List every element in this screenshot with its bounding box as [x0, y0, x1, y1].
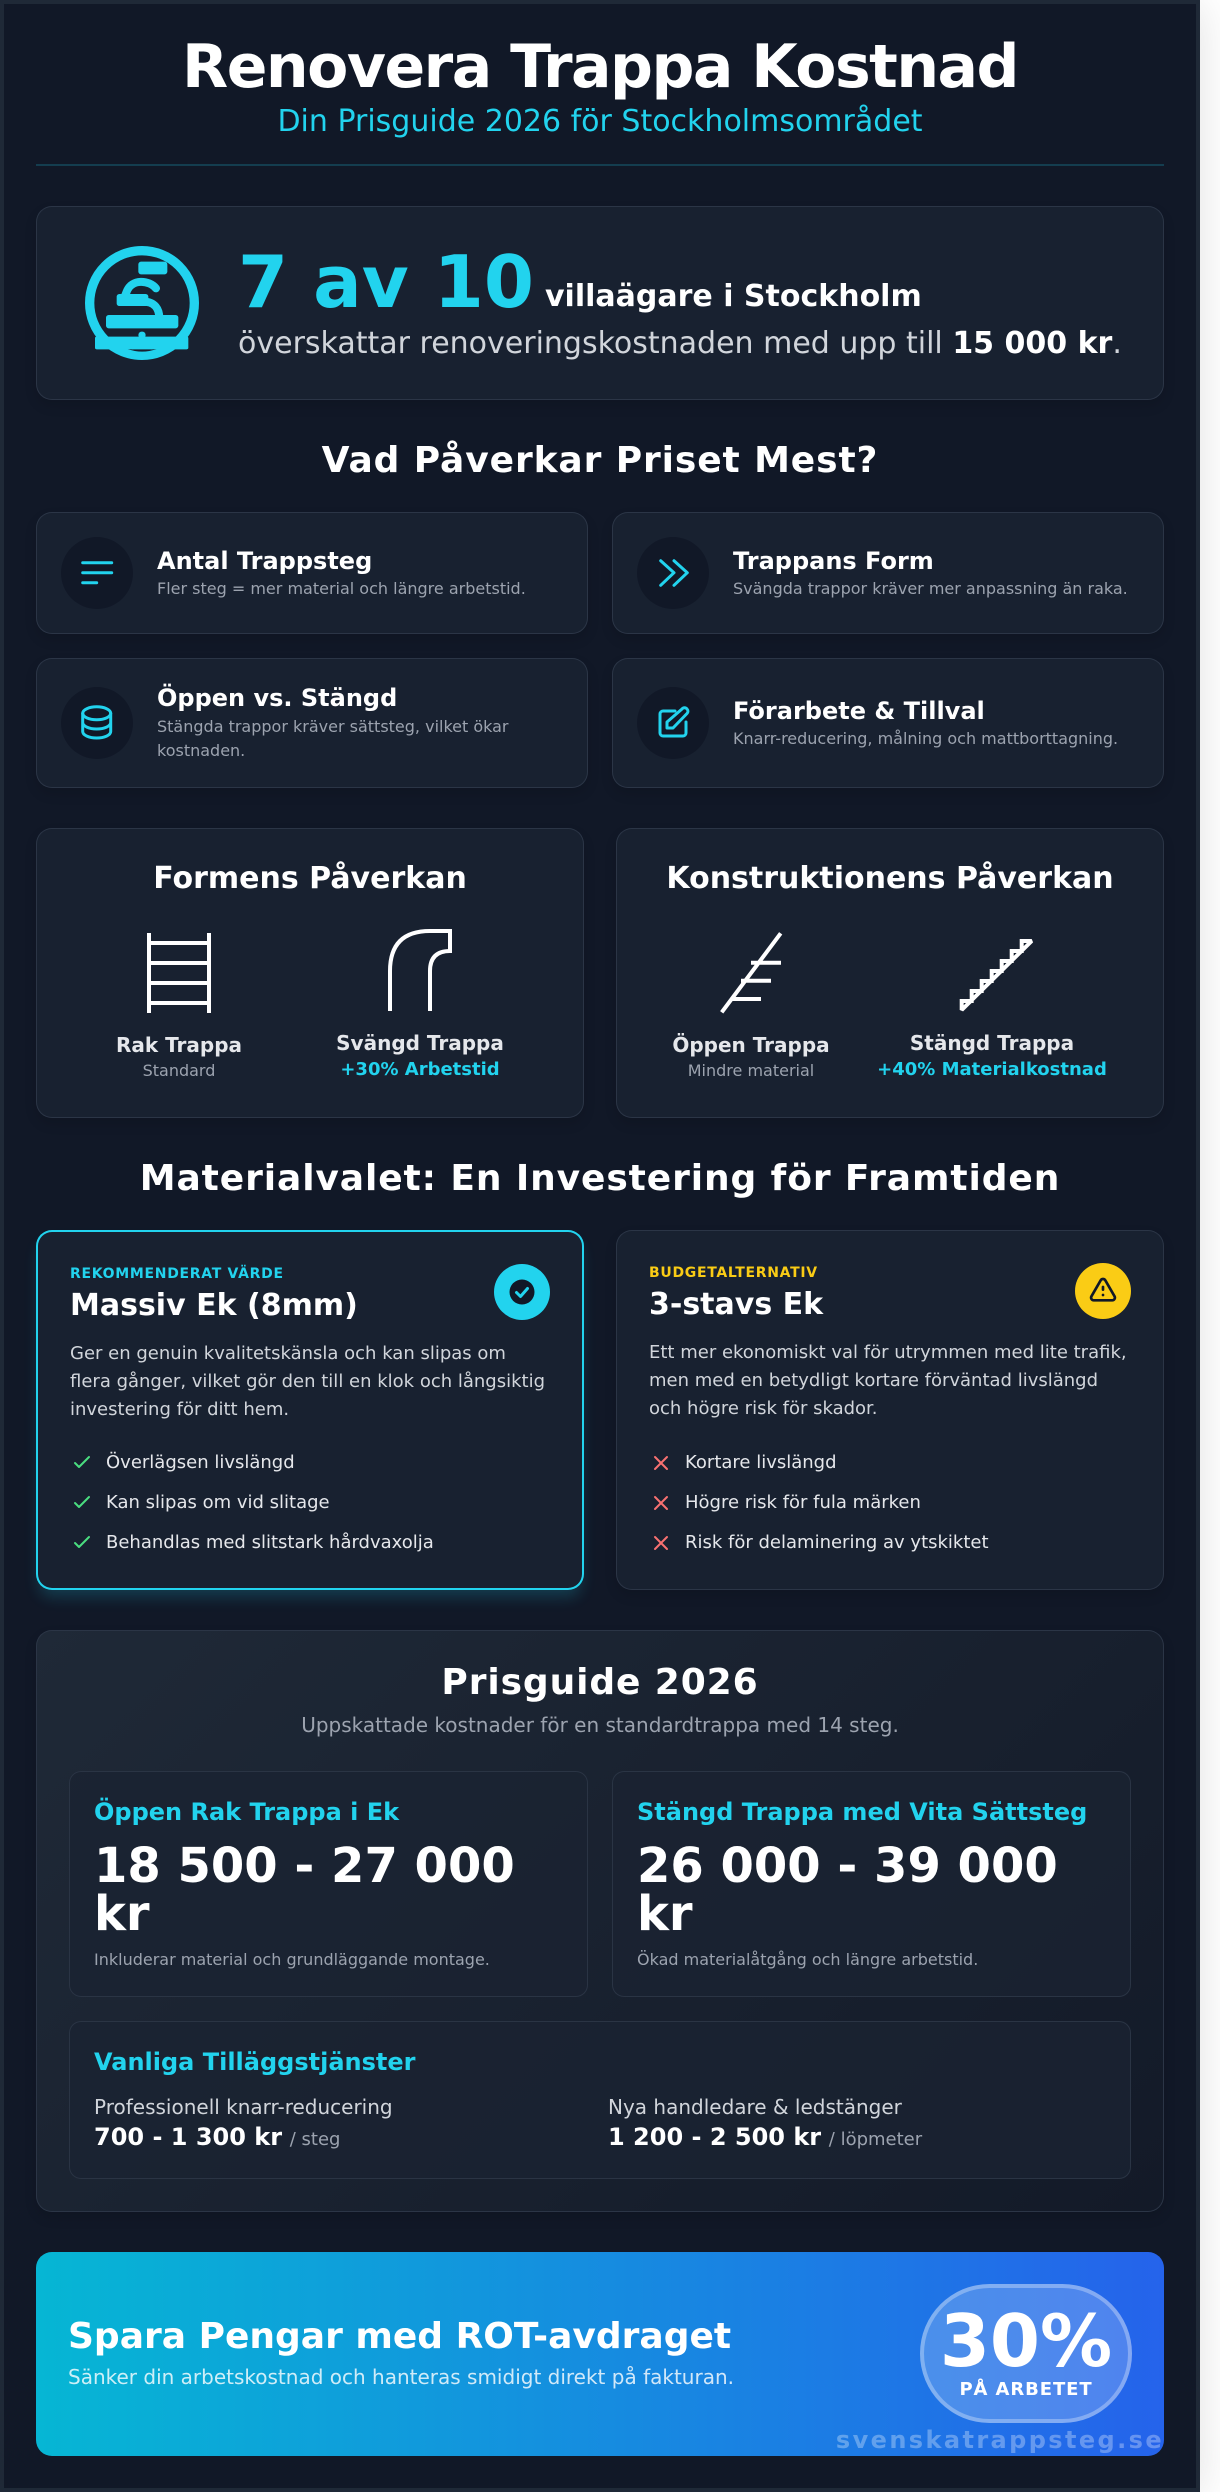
- panel: factor shape: [612, 512, 1164, 634]
- heading: price factors: Vad Påverkar Priset Mest?: [322, 440, 878, 481]
- service price: 1 200 - 2 500 kr / löpmeter: [608, 2123, 922, 2151]
- description: men med en betydligt kortare förväntad livslängd: [649, 1370, 1098, 1391]
- factor text: Knarr-reducering, målning och mattborttagning.: [733, 729, 1118, 748]
- drawback: Kortare livslängd: [685, 1452, 837, 1473]
- panel: construction impact: [616, 828, 1164, 1118]
- factor title: Förarbete & Tillval: [733, 697, 985, 725]
- icon: lines: [61, 537, 133, 609]
- benefit: Behandlas med slitstark hårdvaxolja: [106, 1532, 434, 1553]
- factor text: [157, 717, 509, 760]
- subtitle: Din Prisguide 2026 för Stockholmsområdet: [277, 104, 923, 139]
- factor title: Antal Trappsteg: [157, 547, 372, 575]
- icon: database: [61, 687, 133, 759]
- note: Ökad materialåtgång och längre arbetstid.: [637, 1950, 978, 1969]
- description: och högre risk för skador.: [649, 1398, 878, 1419]
- heading: Vanliga Tilläggstjänster: [94, 2048, 415, 2076]
- watermark: svenskatrappsteg.se: [836, 2426, 1164, 2454]
- label: curved stair: Svängd Trappa: [336, 1031, 504, 1055]
- card title: Öppen Rak Trappa i Ek: [94, 1798, 399, 1826]
- material name: Massiv Ek (8mm): [70, 1288, 358, 1323]
- panel: extra services: [69, 2021, 1131, 2179]
- panel: factor prework: [612, 658, 1164, 788]
- price card: open stair: [69, 1771, 588, 1997]
- intro text: Uppskattade kostnader för en standardtrappa med 14 steg.: [301, 1713, 899, 1737]
- panel: ROT deduction banner: [36, 2252, 1164, 2456]
- factor text: Stängda trappor kräver sättsteg, vilket ökar: [157, 717, 509, 736]
- factor text: Svängda trappor kräver mer anpassning än raka.: [733, 579, 1128, 598]
- icon: chevrons: [637, 537, 709, 609]
- price range: kr: [637, 1886, 693, 1942]
- tag: BUDGETALTERNATIV: [649, 1265, 818, 1281]
- price range: 18 500 - 27 000: [94, 1838, 515, 1894]
- price range: [94, 1838, 515, 1942]
- note: Inkluderar material och grundläggande montage.: [94, 1950, 490, 1969]
- panel: engineered oak: [616, 1230, 1164, 1590]
- factor title: Trappans Form: [733, 547, 934, 575]
- note: straight stair: Standard: [143, 1061, 215, 1080]
- benefit: Kan slipas om vid slitage: [106, 1492, 330, 1513]
- drawback: Högre risk för fula märken: [685, 1492, 921, 1513]
- description: flera gånger, vilket gör den till en klok och långsiktig: [70, 1371, 545, 1392]
- icon: closed stair: [960, 939, 1034, 1012]
- big number: 7 av 10: [238, 240, 534, 324]
- stat label: villaägare i Stockholm: [545, 279, 922, 314]
- badge number: 30%: [940, 2299, 1112, 2383]
- heading: material choice: Materialvalet: En Investering för Framtiden: [140, 1158, 1060, 1199]
- description: [70, 1343, 545, 1420]
- icon: curved stair: [388, 929, 452, 1011]
- panel: shape impact: [36, 828, 584, 1118]
- heading: Formens Påverkan: [153, 861, 467, 896]
- banner text: Sänker din arbetskostnad och hanteras smidigt direkt på fakturan.: [68, 2365, 734, 2389]
- panel: factor open vs closed: [36, 658, 588, 788]
- heading: Konstruktionens Påverkan: [666, 861, 1114, 896]
- factor text: Fler steg = mer material och längre arbetstid.: [157, 579, 526, 598]
- drawback: Risk för delaminering av ytskiktet: [685, 1532, 989, 1553]
- icon: straight stair: [147, 933, 211, 1013]
- icon: open stair: [720, 932, 782, 1014]
- note: curved stair: +30% Arbetstid: [340, 1059, 500, 1080]
- label: open stair: Öppen Trappa: [672, 1033, 830, 1057]
- service label: Nya handledare & ledstänger: [608, 2095, 902, 2119]
- label: straight stair: Rak Trappa: [116, 1033, 242, 1057]
- price card: closed stair: [612, 1771, 1131, 1997]
- badge: 30 percent: [920, 2284, 1132, 2423]
- factor title: Öppen vs. Stängd: [157, 684, 397, 712]
- stat description: överskattar renoveringskostnaden med upp till 15 000 kr.: [238, 326, 1122, 361]
- icon: stairs and money symbol in circle: [85, 246, 199, 360]
- badge label: PÅ ARBETET: [959, 2379, 1093, 2400]
- panel: solid oak: [36, 1230, 584, 1590]
- description: Ett mer ekonomiskt val för utrymmen med lite trafik,: [649, 1342, 1127, 1363]
- card title: Stängd Trappa med Vita Sättsteg: [637, 1798, 1087, 1826]
- panel: hero statistic: [36, 206, 1164, 400]
- description: Ger en genuin kvalitetskänsla och kan slipas om: [70, 1343, 506, 1364]
- icon: edit: [637, 687, 709, 759]
- tag: REKOMMENDERAT VÄRDE: [70, 1266, 284, 1282]
- note: open stair: Mindre material: [688, 1061, 814, 1080]
- material name: 3-stavs Ek: [649, 1287, 823, 1322]
- banner heading: Spara Pengar med ROT-avdraget: [68, 2316, 731, 2357]
- heading: Prisguide 2026: [441, 1662, 759, 1703]
- description: [649, 1342, 1127, 1419]
- icon: warning badge: [1075, 1263, 1131, 1319]
- icon: check badge: [494, 1264, 550, 1320]
- price range: kr: [94, 1886, 150, 1942]
- price range: 26 000 - 39 000: [637, 1838, 1058, 1894]
- label: closed stair: Stängd Trappa: [910, 1031, 1074, 1055]
- note: closed stair: +40% Materialkostnad: [877, 1059, 1107, 1080]
- factor text: kostnaden.: [157, 741, 245, 760]
- panel: price guide: [36, 1630, 1164, 2212]
- description: investering för ditt hem.: [70, 1399, 289, 1420]
- title: Renovera Trappa Kostnad: [182, 32, 1018, 102]
- service label: Professionell knarr-reducering: [94, 2095, 393, 2119]
- panel: factor steps: [36, 512, 588, 634]
- benefit: Överlägsen livslängd: [106, 1452, 295, 1473]
- price range: [637, 1838, 1058, 1942]
- service price: 700 - 1 300 kr / steg: [94, 2123, 340, 2151]
